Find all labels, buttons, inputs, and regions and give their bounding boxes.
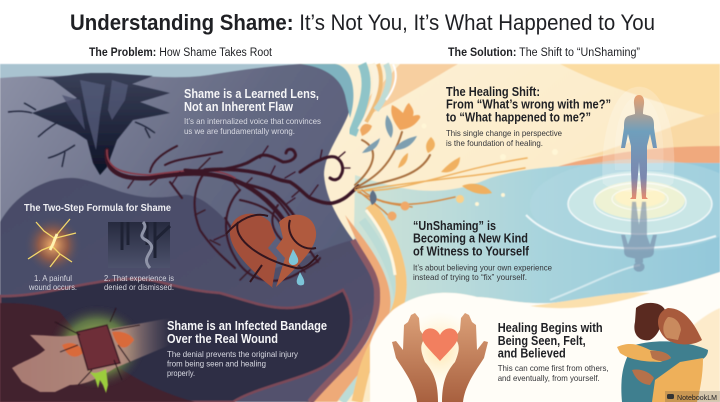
panel: solution background	[300, 64, 720, 402]
panel: wave stripes at top centre	[352, 64, 396, 135]
text: infected bandage: Over the Real Wound	[167, 331, 278, 346]
heading: the solution: The Solution: The Shift to “UnShaming”	[448, 47, 640, 59]
text: unshaming witness: “UnShaming” is	[413, 218, 496, 233]
text: infected bandage: The denial prevents the original injury	[167, 349, 299, 359]
text: learned lens: Not an Inherent Flaw	[184, 99, 294, 114]
illustration: hands holding heart	[392, 312, 488, 402]
text: healing shift: to “What happened to me?”	[446, 109, 591, 124]
text: learned lens: It’s an internalized voice that convinces	[184, 116, 321, 126]
text: unshaming witness	[413, 218, 552, 282]
text: healing shift: The Healing Shift:	[446, 84, 540, 99]
text: step 2: 2. That experience is	[104, 274, 174, 283]
text: healing begins: Being Seen, Felt,	[498, 333, 586, 348]
text: healing begins: and eventually, from yourself.	[498, 373, 600, 383]
text: infected bandage	[167, 318, 327, 378]
heading: two-step formula: The Two-Step Formula for Shame	[24, 203, 171, 214]
text: healing begins: Healing Begins with	[498, 320, 603, 335]
text: step 1: 1. A painful	[34, 274, 72, 283]
illustration: blooming branches	[355, 103, 558, 220]
icon: painful wound	[24, 216, 82, 274]
text: healing shift	[446, 84, 611, 148]
panel: problem background	[0, 64, 377, 402]
icon: tear drops	[289, 249, 304, 285]
stripes	[305, 215, 391, 402]
text: healing begins: This can come first from others,	[498, 363, 609, 373]
badge: NotebookLM	[665, 391, 720, 402]
illustration: chasm crack	[8, 73, 170, 175]
text: healing shift: From “What’s wrong with me?”	[446, 97, 611, 112]
illustration: broken heart	[226, 214, 318, 288]
text: healing shift: is the foundation of healing.	[446, 138, 543, 148]
illustration: bandaged arm	[12, 305, 170, 393]
text: unshaming witness: instead of trying to “fix” yourself.	[413, 272, 527, 282]
text: healing begins	[498, 320, 609, 383]
illustration: glowing person	[603, 87, 674, 199]
text: unshaming witness: of Witness to Yourself	[413, 243, 530, 258]
text: step 1: wound occurs.	[28, 283, 77, 292]
text: step 2	[104, 274, 174, 292]
text: step 2: denied or dismissed.	[104, 283, 174, 292]
illustration: ripples and reflection	[526, 159, 720, 300]
badge: NotebookLM: NotebookLM	[677, 393, 717, 402]
icon: large flower	[391, 103, 420, 130]
text: healing shift: This single change in perspective	[446, 128, 562, 138]
text: learned lens	[184, 86, 321, 136]
text: infected bandage: properly.	[167, 368, 195, 378]
text: learned lens: Shame is a Learned Lens,	[184, 86, 319, 101]
title: Understanding Shame: It’s Not You, It’s What Happened to You	[70, 10, 655, 35]
illustration: embracing couple	[617, 303, 708, 402]
text: unshaming witness: It’s about believing your own experience	[413, 263, 552, 273]
text: healing begins: and Believed	[498, 346, 566, 361]
illustration: thorn vines	[107, 146, 358, 281]
icon: denied path forest	[108, 222, 170, 268]
text: learned lens: us we are fundamentally wrong.	[184, 126, 295, 136]
text: step 1	[28, 274, 77, 292]
text: infected bandage: Shame is an Infected Bandage	[167, 318, 327, 333]
text: infected bandage: from being seen and healing	[167, 358, 266, 368]
text: unshaming witness: Becoming a New Kind	[413, 231, 528, 246]
heading: the problem: The Problem: How Shame Takes Root	[89, 47, 273, 59]
icon: glowing heart	[422, 328, 458, 361]
